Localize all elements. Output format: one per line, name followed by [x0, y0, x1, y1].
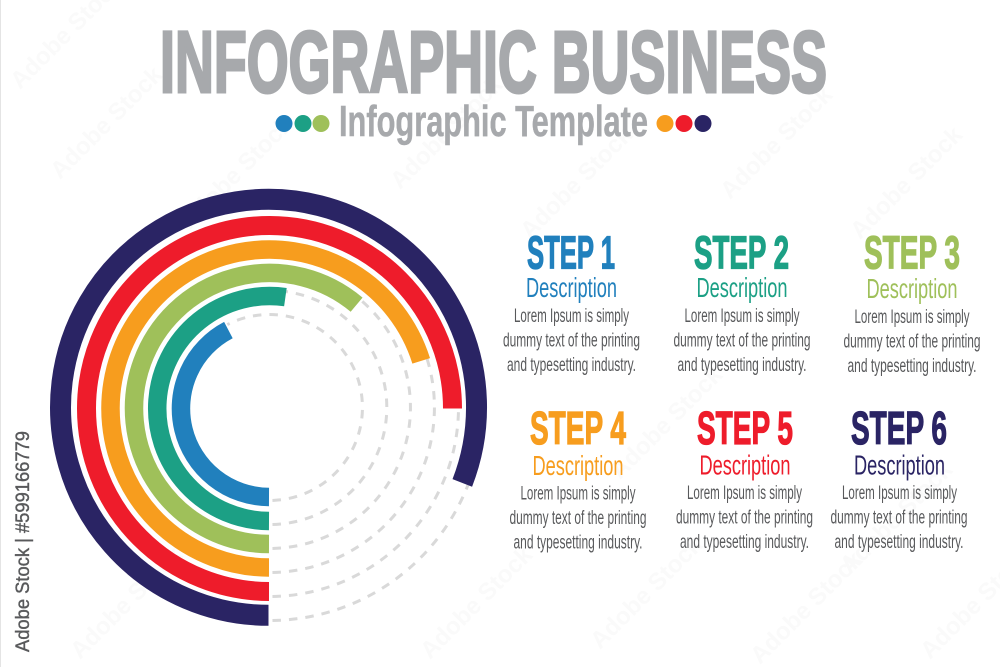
step 5 description: Description: [700, 450, 790, 480]
step 1 body: Lorem Ipsum is simply: [514, 305, 629, 327]
step 1 description: Description: [526, 272, 617, 303]
step 5 heading: STEP 5: [697, 402, 793, 454]
step 5 block: [676, 402, 813, 553]
stock watermark pattern: Adobe Stock: [515, 121, 638, 244]
arc: step 1 blue: [181, 330, 269, 497]
stock watermark pattern: Adobe Stock: [415, 541, 538, 664]
step 2 body: dummy text of the printing: [674, 330, 810, 352]
step 2 description: Description: [696, 272, 788, 303]
step 4 body: dummy text of the printing: [510, 507, 646, 529]
step 2 body: Lorem Ipsum is simply: [684, 305, 800, 327]
step 1 heading: STEP 1: [527, 226, 615, 278]
step 4 body: Lorem Ipsum is simply: [520, 482, 636, 504]
stock watermark pattern: Adobe Stock: [45, 61, 168, 184]
step 4 description: Description: [532, 450, 624, 481]
stock watermark pattern: Adobe Stock: [845, 121, 968, 244]
subtitle: Infographic Template: [339, 97, 648, 146]
stock watermark pattern: Adobe Stock: [605, 361, 728, 484]
arc: step 4 orange: [110, 250, 421, 568]
stock watermark pattern: Adobe Stock: [65, 541, 188, 664]
stock watermark pattern: Adobe Stock: [745, 546, 868, 667]
circular progress chart: [61, 199, 477, 620]
step 6 body: [830, 482, 968, 553]
step 1 body: dummy text of the printing: [503, 330, 640, 352]
step 1 body: [503, 305, 640, 376]
adobe stock credit: Adobe Stock | #599166779: [13, 431, 34, 652]
step 3 block: [844, 226, 980, 377]
step 4 body: [510, 482, 646, 554]
step 6 block: [830, 402, 968, 553]
step 6 description: Description: [854, 450, 945, 480]
step 5 body: [676, 482, 813, 553]
stock watermark pattern: Adobe Stock: [385, 71, 508, 194]
step 4 body: and typesetting industry.: [514, 532, 642, 554]
step 3 body: [844, 306, 980, 377]
step 4 block: [510, 402, 646, 554]
step 5 body: Lorem Ipsum is simply: [687, 482, 802, 504]
step 5 body: dummy text of the printing: [676, 506, 813, 528]
stock watermark pattern: Adobe Stock: [715, 81, 838, 204]
step 2 heading: STEP 2: [694, 226, 789, 278]
step 5 body: and typesetting industry.: [680, 531, 809, 553]
step 1 block: [503, 226, 640, 376]
stock watermark pattern: Adobe Stock: [835, 456, 958, 579]
step 4 heading: STEP 4: [530, 402, 626, 454]
left dots: [276, 115, 330, 132]
step 2 body: and typesetting industry.: [678, 354, 806, 376]
stock watermark pattern: Adobe Stock: [585, 531, 708, 654]
right dots: [656, 115, 712, 132]
arc: step 2 teal: [157, 296, 285, 521]
step 2 block: [674, 226, 810, 376]
arc: step 3 green: [134, 273, 357, 544]
stock watermark pattern: Adobe Stock: [175, 111, 298, 234]
arc: step 6 navy: [61, 199, 477, 615]
dashed guide rings: [227, 292, 468, 620]
subtitle row: [276, 97, 712, 146]
step 1 body: and typesetting industry.: [507, 354, 636, 376]
arc: step 5 red: [86, 226, 452, 592]
step 2 body: [674, 305, 810, 376]
